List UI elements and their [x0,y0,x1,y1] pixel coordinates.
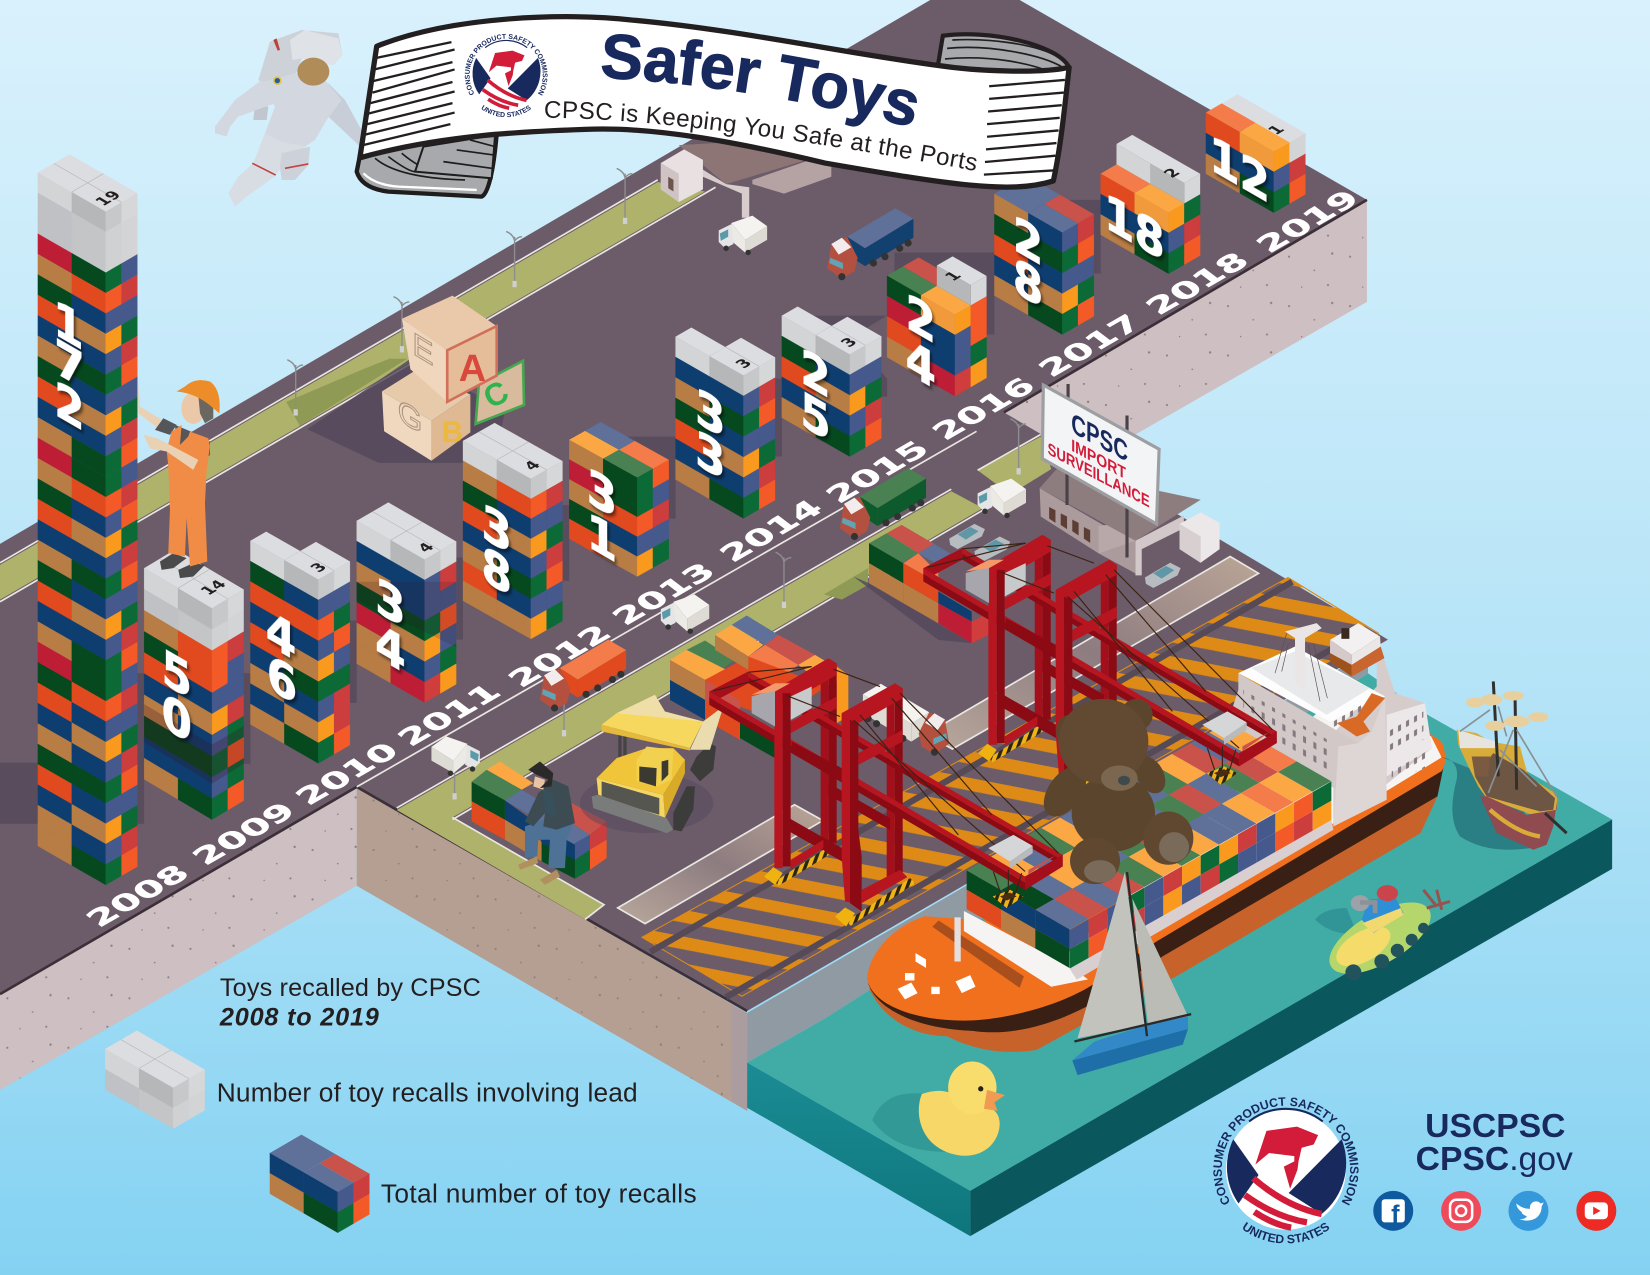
tower totals: white numbers: 2 [800,336,831,411]
tower totals: white numbers: 3 [482,492,512,566]
dock side wall [747,652,1368,1062]
toy blocks A B C: C [477,373,514,415]
year labels: 2014 [712,494,830,567]
tower totals: white numbers: 12 [1209,124,1270,215]
tower totals: white numbers: 1 [53,288,84,362]
tower totals: white numbers: 3 [375,566,406,640]
year labels: 2008 [79,860,197,932]
tower 2018 [1101,135,1200,274]
tower totals: white numbers [53,124,1270,756]
sailboat [1072,872,1191,1075]
hazard stripe zone [642,578,1379,997]
container stack with sitting man [472,761,607,879]
tower totals: white numbers: 3 [587,456,617,531]
green patch near billboard [978,434,1051,494]
container ship [867,623,1445,1052]
banner roll left [357,133,497,197]
tower totals: white numbers: 18 [1104,181,1165,273]
tower totals: white numbers: 3 [695,376,725,451]
loading strip: lower [618,805,823,924]
rubber duck [872,1061,1005,1156]
legend: total label: Total number of toy recalls [381,1178,697,1208]
tower totals: white numbers: 0 [162,681,192,756]
logo: small: UNITED STATES [482,105,531,118]
year labels: 2013 [605,558,723,630]
legend heading: Toys recalled by CPSC [220,974,481,1002]
dump truck [580,695,723,833]
bow and side deck [898,694,1442,999]
tower counts: lead recalls: 2 [1160,166,1185,180]
toy blocks A B C [307,296,524,463]
handle: USCPSC [1425,1108,1565,1145]
tower totals: white numbers: 2 [906,282,936,356]
tower counts: lead recalls: 1 [1264,123,1289,137]
icon: facebook: f [1391,1200,1400,1228]
tower totals: white numbers: 4 [266,598,296,673]
tower counts: lead recalls: 3 [306,560,331,575]
pirate ship [1440,681,1567,850]
ship superstructure [1228,623,1432,826]
container stack: near upper crane [853,525,988,643]
website: CPSC.gov [1416,1141,1573,1178]
logo: large: CONSUMER PRODUCT SAFETY COMMISSION [1213,1097,1359,1206]
icon: instagram [1441,1191,1481,1231]
tower 2019 [1206,94,1305,213]
tower totals: white numbers: 8 [482,534,512,609]
brown hull stripe [868,766,1444,1032]
year labels: 2017 [1031,309,1149,382]
tower counts: lead recalls: 3 [731,356,756,371]
truck: orange [540,640,626,712]
tower 2017 [994,175,1094,335]
toy blocks A B C: A [459,348,486,390]
logo: small: CONSUMER PRODUCT SAFETY COMMISSION [464,34,548,96]
year labels: 2015 [818,436,936,508]
tower totals: white numbers: 7 [54,327,85,401]
tower counts: lead recalls: 19 [91,188,125,208]
icon: facebook [1373,1191,1413,1231]
tower 2008 [38,154,137,885]
green median: front road [397,489,983,919]
logo: large: UNITED STATES [1243,1222,1330,1244]
billboard: SURVEILLANCE [1048,439,1150,512]
ship containers: top tiers [967,722,1331,929]
tower counts: lead recalls: 4 [414,540,439,555]
year labels: 2016 [925,372,1043,445]
ship hull lower [869,736,1442,1052]
green median: back road [0,180,716,602]
tower totals: white numbers: 3 [695,418,725,493]
legend heading [219,974,481,1032]
vans and cars on road [431,216,1181,776]
deck posts under containers [1069,818,1333,980]
tower counts: lead recalls: 14 [196,577,231,598]
year labels: 2019 [1249,185,1367,258]
tower 2012 [463,423,562,639]
toy blocks A B C: B [442,416,463,449]
tower 2010 [250,532,350,763]
road line: year baseline [357,431,977,787]
legend: lead block [105,1031,205,1129]
tower 2011 [357,502,456,703]
tower 2016 [887,256,987,396]
water: left side [747,1062,970,1236]
legend: lead label: Number of toy recalls involving lead [217,1077,638,1107]
truck: blue [827,208,913,280]
icon: twitter [1508,1191,1548,1231]
tower totals: white numbers: 2 [54,369,85,443]
legend: total block [270,1135,369,1233]
year labels: 2011 [390,679,508,751]
tower counts: lead recalls: 1 [941,269,966,284]
ship containers: right side [1070,781,1331,968]
banner end stripes [363,42,1065,175]
subtitle: CPSC is Keeping You Safe at the Ports [545,101,977,170]
banner roll right [937,34,1069,84]
tower 2014 [676,327,775,518]
orange deck rim [867,731,1445,1021]
tower counts: lead recalls: 4 [520,458,545,473]
title: Safer Toys [602,34,917,127]
year labels: 2010 [288,737,406,810]
water: top surface [747,673,1612,1191]
tower totals: white numbers: 1 [587,501,617,575]
tower totals: white numbers: 6 [267,643,297,717]
icon: youtube [1576,1191,1616,1231]
banner ribbon [360,17,1069,187]
ship containers: left side [967,870,1070,968]
white truck under crane [863,684,949,756]
ground: main road surface [0,0,1388,1011]
tower totals: white numbers: 5 [800,380,831,454]
astronaut [215,30,365,207]
edge line [0,200,1367,1011]
toy blocks A B C: E [413,326,434,373]
billboard [1042,384,1159,558]
concrete wall: left quay [0,787,357,1090]
submarine [1315,885,1450,988]
year labels: 2009 [185,797,303,870]
tower shadows [0,200,1101,824]
truck: green [840,468,926,540]
year labels [79,185,1367,932]
tower counts: lead recalls [91,123,1289,598]
warehouse: top [661,137,831,218]
sitting man [518,761,575,885]
year labels: 2018 [1138,247,1256,320]
loading strip: upper [926,556,1259,749]
tower totals: white numbers: 4 [375,611,406,685]
concrete wall: harbour quay [357,787,747,1111]
warehouse: import surveillance [1040,469,1220,575]
legend heading: 2008 to 2019 [219,1004,379,1032]
tower totals: white numbers: 8 [1013,246,1043,320]
tower 2013 [569,422,669,576]
banner [354,14,1072,199]
tower totals: white numbers: 4 [906,327,936,401]
tower 2015 [782,306,881,457]
tower counts: lead recalls: 3 [837,335,862,350]
lower crane [709,658,1063,926]
concrete wall: upper quay [1004,201,1367,489]
tower totals: white numbers: 5 [162,637,192,712]
worker figure [138,380,220,578]
tower 2009 [144,549,244,820]
upper crane [923,535,1277,803]
teddy bear [1035,699,1195,884]
tower totals: white numbers: 2 [1013,204,1043,278]
billboard: IMPORT [1071,435,1126,483]
street lamps [287,168,1026,800]
container stack: near lower crane [670,616,848,758]
year labels: 2012 [501,620,619,692]
water: right side [970,819,1612,1236]
billboard: CPSC [1071,408,1128,469]
toy blocks A B C: G [398,392,422,442]
